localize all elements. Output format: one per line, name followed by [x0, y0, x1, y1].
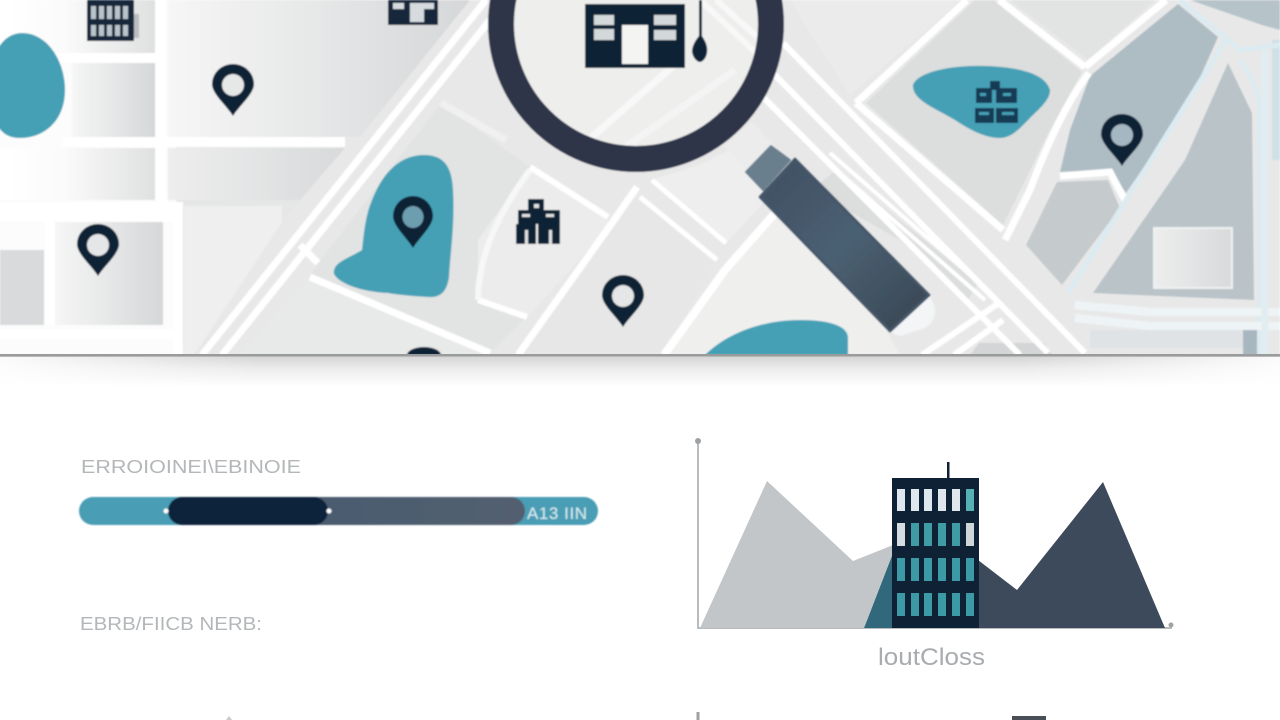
handle cap [892, 297, 934, 336]
pin 3 [393, 196, 433, 248]
magnifying glass [501, 0, 935, 336]
handle [760, 159, 929, 331]
icon: building top left [87, 0, 139, 41]
progress bar [79, 497, 598, 525]
pin 4 [602, 275, 644, 327]
windows row 3 [897, 558, 974, 581]
bar dot right [326, 508, 332, 514]
dark area [864, 482, 1165, 628]
panel: city map [0, 0, 1280, 355]
second chart building top [1012, 716, 1046, 720]
windows row 1 [897, 489, 974, 511]
axis end [1168, 622, 1174, 628]
teal area bottom [705, 320, 848, 355]
bar dot left [164, 508, 168, 514]
windows row 4 [897, 593, 974, 616]
light area [700, 481, 893, 628]
heading: second label: EBRB/FIICB NERB: [80, 614, 262, 634]
icon: building on teal [975, 81, 1018, 123]
building [892, 462, 979, 628]
lens [511, 0, 761, 149]
icon: building centre [516, 199, 560, 244]
chart caption: loutCloss [878, 644, 985, 671]
icon: building top centre [388, 0, 438, 25]
bar segment dark [168, 497, 328, 525]
heading: bar label: ERROIOINEI\EBINOIE [81, 457, 301, 477]
handle collar [746, 146, 790, 190]
icon: lens marker [692, 0, 707, 62]
water channels [1068, 0, 1280, 355]
axis tip [695, 438, 701, 444]
bar segment mid [300, 497, 525, 525]
roads [176, 0, 1168, 354]
teal overlap [864, 553, 893, 628]
chart: area chart with building [695, 438, 1174, 628]
bar value: A13 IIN [527, 504, 587, 523]
teal area left [0, 33, 65, 138]
teal area centre [334, 155, 453, 297]
teal area right [913, 66, 1050, 138]
pin 1 [212, 64, 254, 116]
windows row 2 [897, 523, 974, 546]
pin 5 [1101, 114, 1143, 166]
pin 2 [77, 224, 119, 276]
second chart axis tip [696, 712, 700, 720]
building in lens [585, 4, 685, 68]
chart axes [698, 441, 1172, 628]
ring [501, 0, 771, 159]
pin 6 partial [407, 347, 441, 355]
second bar-row mark [226, 716, 232, 720]
handle neck [724, 122, 778, 174]
map blocks [0, 0, 1280, 355]
map shadow [0, 354, 1280, 388]
